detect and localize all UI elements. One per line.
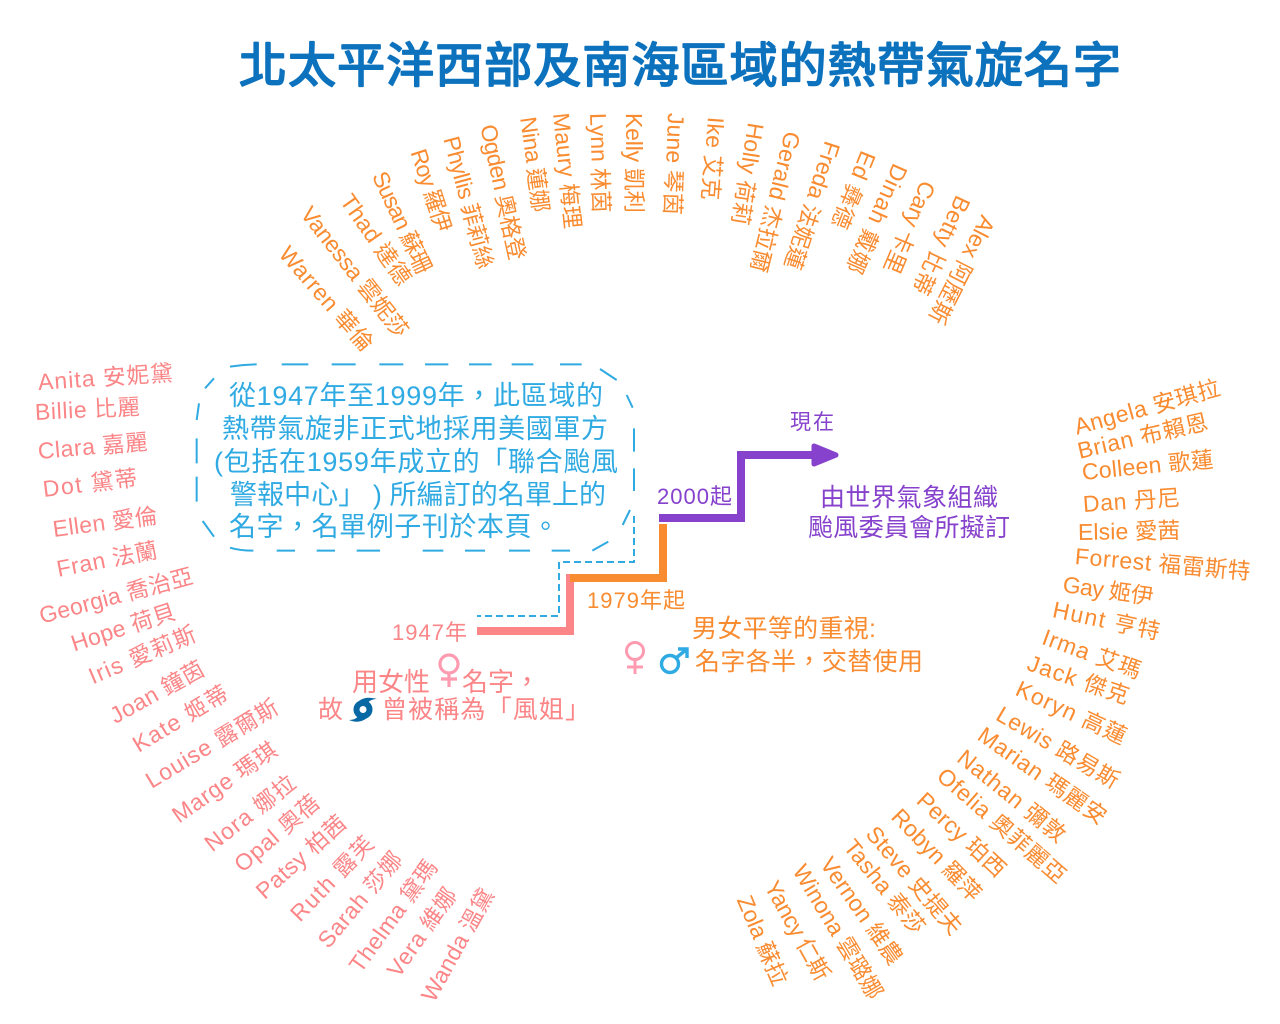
name: Clara: Clara 嘉麗 [37, 428, 149, 464]
callout dashed outline [197, 364, 634, 551]
name: Forrest: Forrest 福雷斯特 [1074, 543, 1252, 584]
panel: top arc of names 1979 onwards [274, 112, 1000, 356]
name: Holly: Holly 荷莉 [727, 121, 769, 227]
name: Ruth: Ruth 露芙 [285, 831, 379, 926]
name: Steve: Steve 史提夫 [861, 821, 968, 940]
label: 1979年起: 1979年起 [587, 588, 685, 613]
text: gender equality: 名字各半，交替使用 [695, 648, 923, 676]
callout connector dashed line [477, 516, 634, 616]
name: Vera: Vera 維娜 [382, 883, 462, 982]
title: 北太平洋西部及南海區域的熱帶氣旋名字 [239, 40, 1121, 93]
name: Angela: Angela 安琪拉 [1071, 374, 1223, 440]
name: Ed: Ed 彝德 [827, 148, 881, 232]
icon: female symbol (left) [440, 655, 458, 687]
name: Robyn: Robyn 羅萍 [886, 803, 987, 906]
name: Gay: Gay 姬伊 [1061, 571, 1155, 610]
name: Louise: Louise 露爾斯 [141, 694, 283, 793]
callout text: 熱帶氣旋非正式地採用美國軍方 [222, 414, 608, 444]
name: Phyllis: Phyllis 菲莉絲 [438, 133, 499, 271]
callout text: (包括在1959年成立的「聯合颱風 [214, 447, 618, 477]
label: 1947年: 1947年 [392, 620, 467, 645]
name: Kate: Kate 姬蒂 [128, 680, 233, 757]
name: Vanessa: Vanessa 雲妮莎 [296, 201, 414, 343]
name: Thelma: Thelma 黛瑪 [344, 855, 442, 977]
name: Warren: Warren 華倫 [274, 241, 379, 356]
name: Joan: Joan 鐘茵 [105, 655, 209, 728]
name: Dan: Dan 丹尼 [1082, 484, 1181, 517]
name: June: June 琴茵 [659, 113, 689, 215]
icon: female symbol (right) [626, 642, 644, 674]
name: Nathan: Nathan 彌敦 [952, 744, 1071, 847]
name: Vernon: Vernon 維農 [815, 852, 908, 969]
name: Ogden: Ogden 奧格登 [475, 122, 531, 262]
name: Freda: Freda 法妮蓮 [779, 138, 845, 273]
text: WMO description: 由世界氣象組織 [820, 484, 998, 512]
callout text: 名字，名單例子刊於本頁。 [229, 512, 559, 542]
text: female names note line 2 end: 曾被稱為「風姐」 [382, 696, 590, 724]
name: Jack: Jack 傑克 [1024, 650, 1133, 709]
label: 現在: 現在 [790, 411, 834, 434]
name: Patsy: Patsy 柏茜 [251, 810, 351, 904]
callout text [214, 381, 618, 542]
name: Anita: Anita 安妮黛 [37, 360, 174, 395]
panel: right arc of alternating names [732, 374, 1252, 1003]
name: Ike: Ike 艾克 [697, 116, 729, 201]
name: Opal: Opal 奧蓓 [229, 789, 324, 877]
name: Ofelia: Ofelia 奧菲麗亞 [932, 762, 1071, 888]
timeline step: purple 2000 with arrow [659, 446, 836, 518]
name: Billie: Billie 比麗 [34, 394, 140, 425]
text: gender equality [692, 615, 923, 676]
name: Nora: Nora 娜拉 [199, 769, 300, 856]
icon: male symbol [662, 649, 687, 672]
name: Fran: Fran 法蘭 [54, 537, 159, 582]
name: Percy: Percy 珀西 [912, 787, 1011, 882]
panel: left arc of female names [34, 360, 499, 1006]
name: Gerald: Gerald 杰拉爾 [746, 129, 806, 275]
name: Dot: Dot 黛蒂 [41, 465, 139, 502]
name: Koryn: Koryn 高蓮 [1012, 675, 1131, 749]
callout text: 從1947年至1999年，此區域的 [229, 381, 603, 411]
text: gender equality: 男女平等的重視: [692, 615, 876, 643]
name: Colleen: Colleen 歌蓮 [1081, 446, 1215, 485]
name: Marian: Marian 瑪麗安 [973, 722, 1112, 829]
name: Iris: Iris 愛莉斯 [85, 621, 200, 689]
name: Brian: Brian 布賴恩 [1075, 408, 1210, 464]
name: Winona: Winona 雲璐娜 [788, 860, 888, 1003]
name: Georgia: Georgia 喬治亞 [36, 563, 196, 629]
name: Dinah: Dinah 戴娜 [841, 160, 913, 278]
text: WMO description [808, 484, 1010, 542]
text: WMO description: 颱風委員會所擬訂 [808, 514, 1010, 542]
name: Susan: Susan 蘇珊 [367, 167, 437, 278]
name: Irma: Irma 艾瑪 [1039, 624, 1145, 684]
text: female names note line 2 start: 故 [318, 696, 343, 724]
name: Tasha: Tasha 泰莎 [839, 834, 931, 939]
name: Nina: Nina 蓮娜 [515, 115, 554, 214]
callout text: 警報中心」 ) 所編訂的名單上的 [230, 480, 606, 510]
label: 2000起: 2000起 [657, 484, 732, 509]
name: Betty: Betty 比蒂 [907, 192, 976, 299]
icon: typhoon [349, 698, 377, 722]
timeline step: pink 1947 [477, 574, 570, 631]
text: female names note line 1: 用女性 [352, 667, 430, 697]
panel: dashed callout [197, 364, 634, 616]
name: Kelly: Kelly 凱利 [621, 113, 647, 213]
name: Sarah: Sarah 莎娜 [312, 846, 407, 953]
name: Hunt: Hunt 亨特 [1051, 596, 1163, 644]
name: Cary: Cary 卡里 [879, 177, 941, 278]
name: Hope: Hope 荷貝 [68, 598, 178, 656]
name: Thad: Thad 達德 [335, 189, 417, 290]
name: Yancy: Yancy 仁斯 [760, 876, 836, 985]
name: Alex: Alex 阿歷斯 [924, 212, 1000, 328]
name: Lynn: Lynn 林茵 [585, 113, 614, 213]
name: Roy: Roy 羅伊 [406, 146, 457, 235]
name: Lewis: Lewis 路易斯 [992, 701, 1124, 793]
text: female names note line 1 end: 名字， [462, 667, 540, 697]
timeline step: orange 1979 [570, 524, 663, 578]
name: Wanda: Wanda 溫黛 [416, 884, 499, 1006]
name: Marge: Marge 瑪琪 [167, 737, 282, 828]
name: Maury: Maury 梅理 [548, 112, 586, 230]
name: Ellen: Ellen 愛倫 [51, 502, 159, 542]
name: Zola: Zola 蘇拉 [732, 892, 793, 989]
name: Elsie: Elsie 愛茜 [1078, 517, 1180, 545]
